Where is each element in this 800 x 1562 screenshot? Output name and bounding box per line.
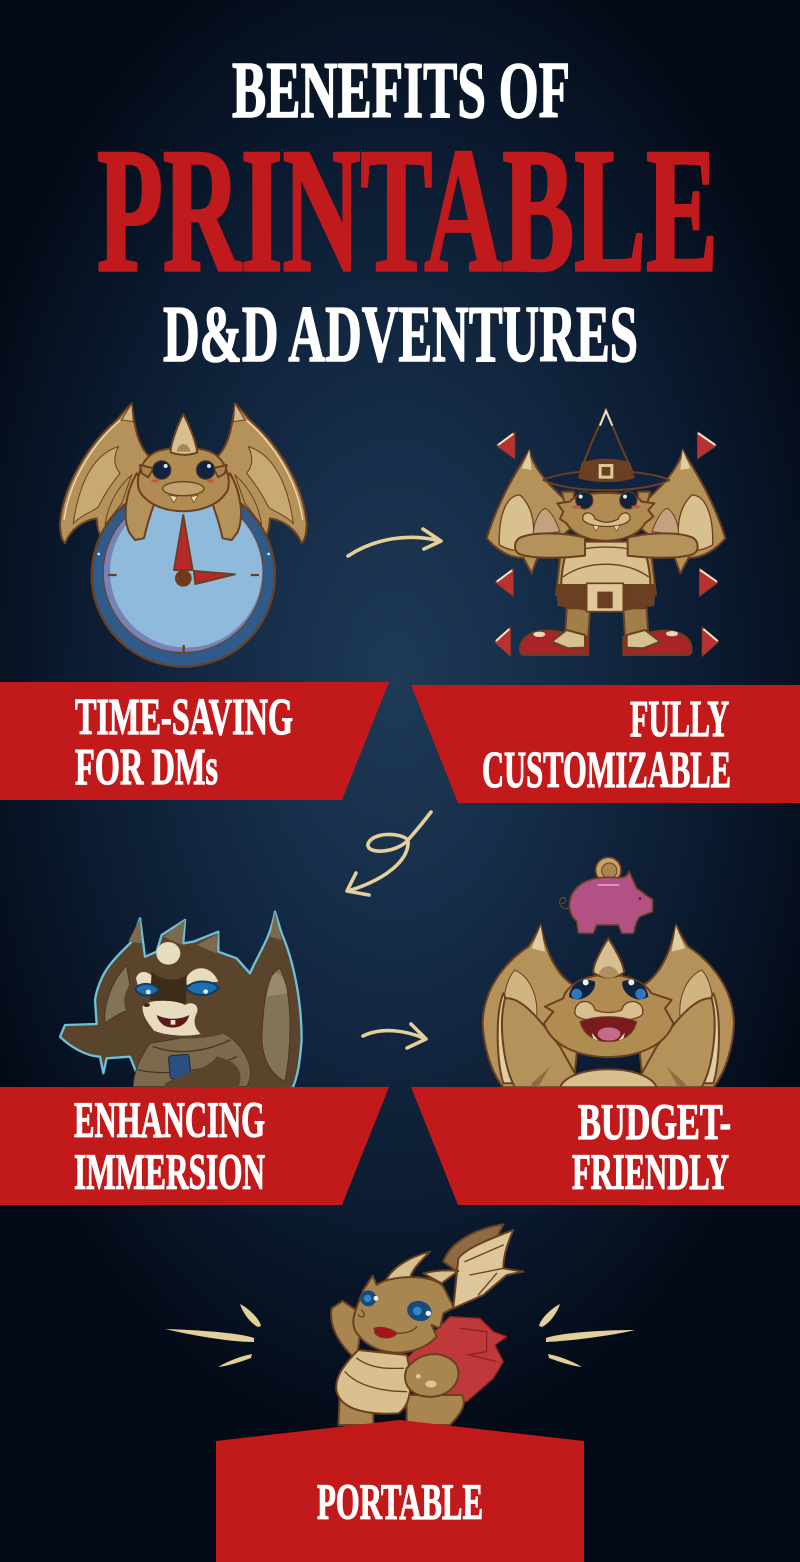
icon: motion rays right: [539, 1304, 635, 1367]
panel: enhancing immersion: [0, 912, 389, 1205]
banner: fully customizable: [411, 685, 800, 803]
label: time-saving for DMs: FOR DMs: [75, 739, 218, 796]
icon: coin and piggy bank: [560, 857, 653, 933]
panel: time-saving: [0, 403, 389, 800]
label: time-saving for DMs: TIME-SAVING: [75, 689, 293, 746]
icon: happy dragon: [483, 925, 734, 1087]
banner: enhancing immersion: [0, 1087, 389, 1205]
arrow: time-saving to customizable: [348, 529, 441, 556]
label: enhancing immersion: IMMERSION: [74, 1145, 265, 1201]
label: fully customizable: FULLY: [630, 691, 729, 748]
icon: motion rays left: [165, 1304, 261, 1367]
arrow: customizable to immersion: [347, 812, 431, 895]
icon: dragon on clock: [60, 403, 307, 667]
title line: benefits of: BENEFITS OF: [232, 47, 570, 135]
arrow: immersion to budget: [363, 1024, 426, 1048]
icon: ghostly dragon: [60, 912, 302, 1090]
banner: budget-friendly: [411, 1087, 800, 1205]
panel: portable: [165, 1224, 635, 1562]
label: fully customizable: [482, 691, 731, 799]
label: time-saving for DMs: [75, 689, 293, 796]
banner: time-saving: [0, 682, 389, 800]
title: [97, 47, 718, 379]
icon: dragon with backpack: [331, 1224, 523, 1425]
label: budget-friendly: BUDGET-: [578, 1095, 731, 1151]
label: budget-friendly: [572, 1095, 731, 1201]
panel: fully customizable: [411, 409, 800, 803]
label: enhancing immersion: [74, 1093, 265, 1201]
label: enhancing immersion: ENHANCING: [74, 1093, 265, 1149]
label: portable: PORTABLE: [317, 1475, 483, 1531]
icon: wizard dragon: [487, 409, 725, 657]
panel: budget-friendly: [411, 857, 800, 1205]
banner: portable: [216, 1420, 584, 1562]
